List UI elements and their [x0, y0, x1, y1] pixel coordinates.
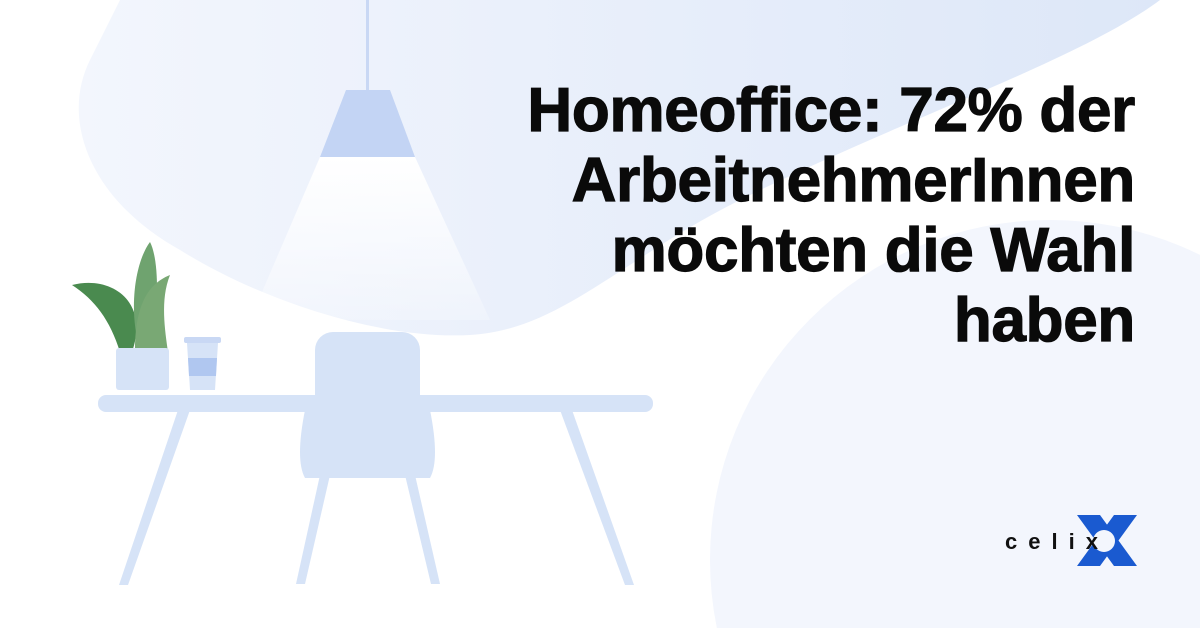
plant	[72, 242, 170, 390]
chair	[296, 332, 440, 584]
title	[527, 76, 1135, 355]
lamp	[250, 0, 490, 320]
logo: celix	[1005, 529, 1109, 554]
title: Homeoffice: 72% der	[527, 76, 1135, 145]
desk	[98, 395, 653, 585]
background circle bottom right	[710, 220, 1200, 628]
logo	[1005, 515, 1137, 566]
background blob	[79, 0, 1160, 335]
title: möchten die Wahl	[612, 216, 1135, 285]
title: haben	[954, 286, 1135, 355]
coffee cup	[184, 337, 221, 390]
title: ArbeitnehmerInnen	[572, 146, 1135, 215]
